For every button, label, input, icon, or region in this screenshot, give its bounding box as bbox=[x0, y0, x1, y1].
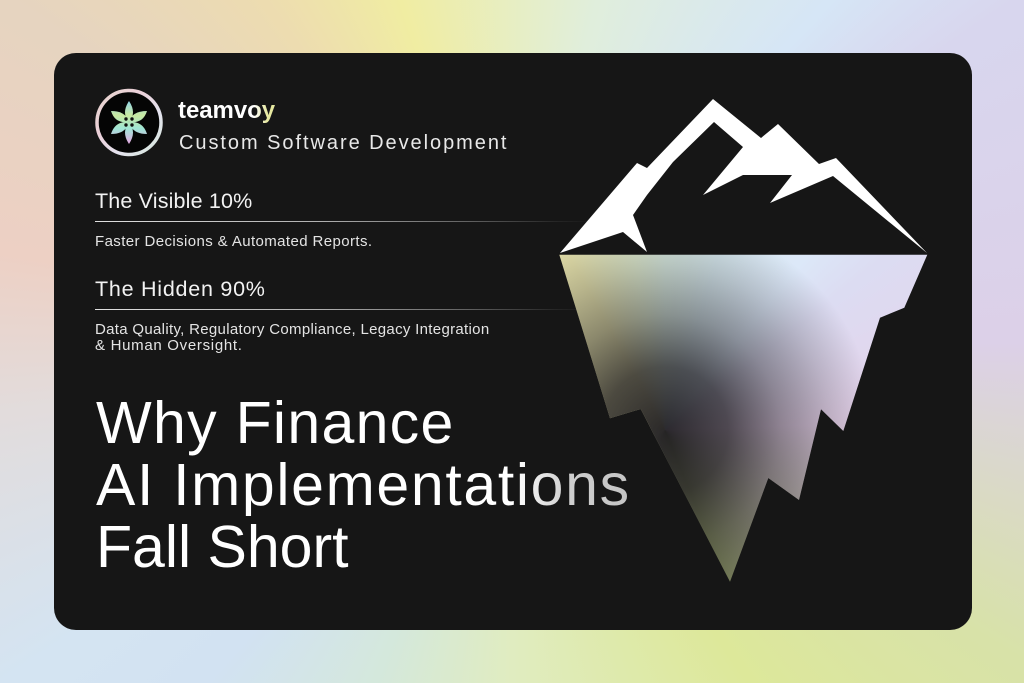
brand subtitle: Custom Software Development bbox=[179, 132, 508, 154]
text: visible description: Faster Decisions & Automated Reports. bbox=[95, 233, 372, 250]
text: hidden description: Data Quality, Regulatory Compliance, Legacy Integration bbox=[95, 321, 489, 338]
heading: the visible 10%: The Visible 10% bbox=[95, 189, 252, 213]
brand name: teamvoy bbox=[178, 97, 275, 124]
title bbox=[96, 390, 631, 580]
iceberg: gradient mass below water bbox=[556, 252, 930, 584]
heading: the hidden 90%: The Hidden 90% bbox=[95, 277, 266, 301]
title: Fall Short bbox=[96, 514, 348, 580]
title: AI Implementations bbox=[96, 452, 631, 518]
divider: visible bbox=[95, 221, 595, 222]
logo badge bbox=[95, 88, 163, 156]
panel: dark card bbox=[54, 53, 972, 630]
text: hidden description bbox=[95, 321, 489, 354]
text: hidden description: & Human Oversight. bbox=[95, 337, 243, 354]
divider: hidden bbox=[95, 309, 595, 310]
title: Why Finance bbox=[96, 390, 455, 456]
